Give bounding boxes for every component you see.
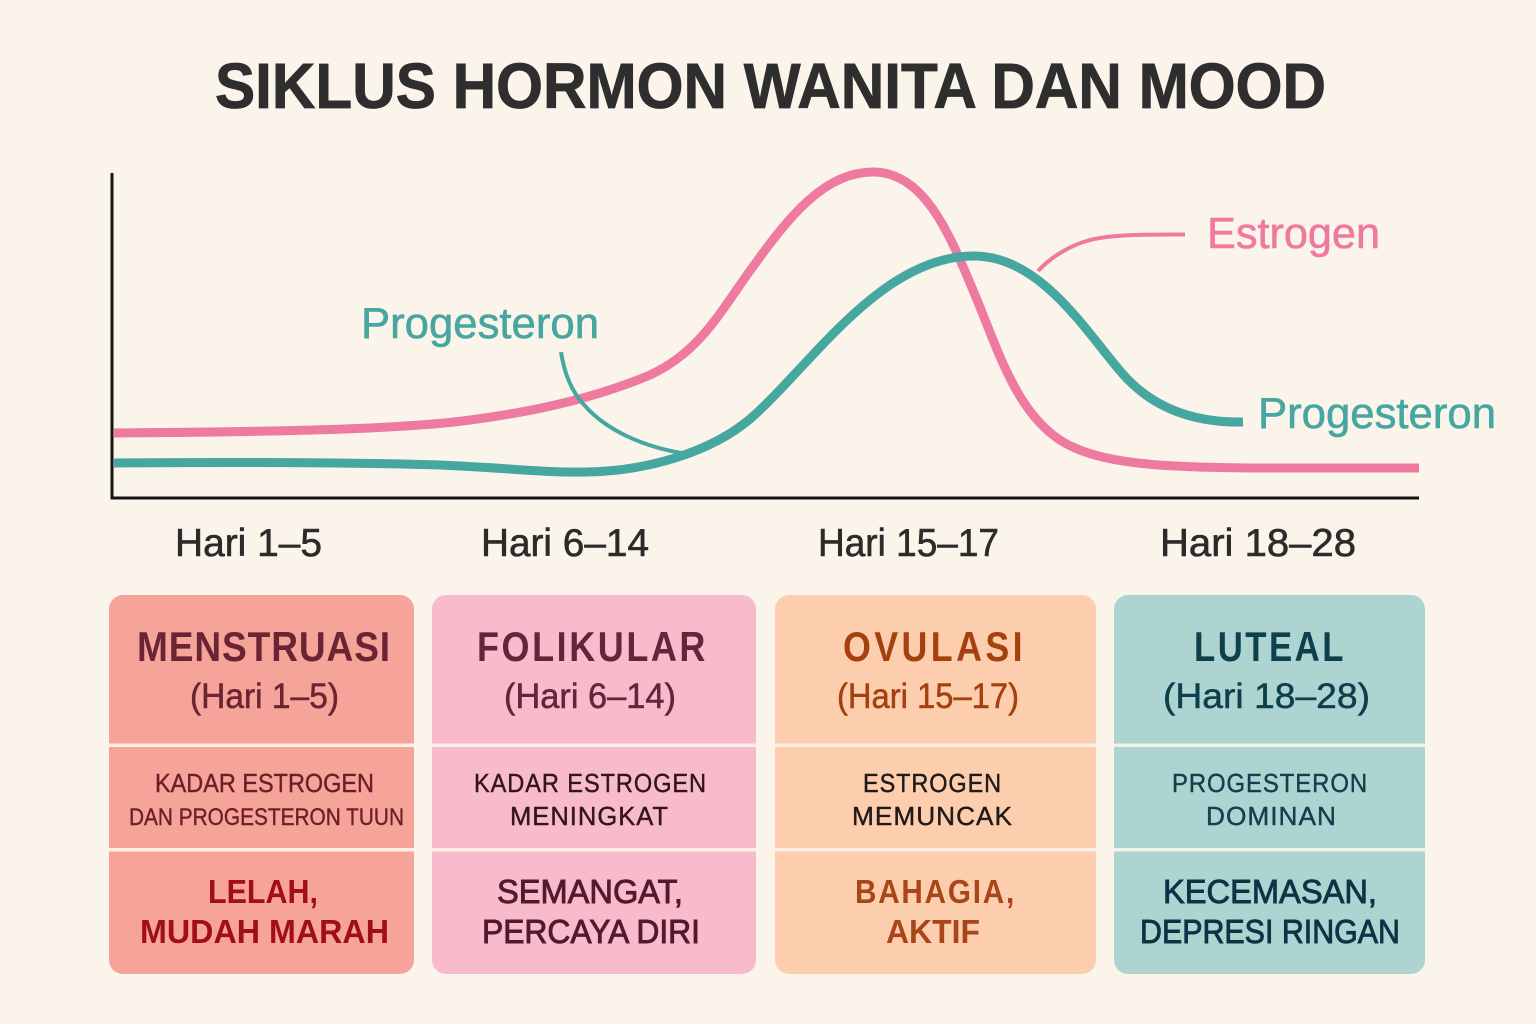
mood text: LELAH, (208, 873, 318, 910)
hormone text: MENINGKAT (510, 801, 669, 831)
hormone text (1172, 768, 1368, 831)
hormone text: DAN PROGESTERON TUUN (129, 804, 404, 831)
phase days: (Hari 15–17) (837, 677, 1019, 716)
estrogen label: Estrogen (1207, 209, 1380, 258)
mood text: KECEMASAN, (1163, 873, 1377, 910)
mood text: PERCAYA DIRI (482, 913, 700, 950)
progesterone callout leader (561, 352, 688, 454)
panel: luteal (1114, 595, 1425, 974)
progesterone label right: Progesteron (1258, 389, 1496, 438)
hormone line chart (112, 172, 1496, 498)
panel: folikular (432, 595, 756, 974)
estrogen callout leader (1038, 234, 1185, 271)
progesterone curve (114, 256, 1243, 472)
phase heading: OVULASI (843, 623, 1026, 670)
panel: menstruasi (109, 595, 414, 974)
hormone text: DOMINAN (1206, 801, 1337, 831)
hormone text (129, 768, 404, 831)
day label 1: Hari 1–5 (175, 522, 322, 565)
mood text (140, 873, 389, 950)
title: SIKLUS HORMON WANITA DAN MOOD (215, 50, 1326, 122)
mood text: BAHAGIA, (855, 873, 1016, 910)
mood text: AKTIF (886, 913, 980, 950)
phase days: (Hari 6–14) (504, 677, 676, 716)
hormone text: KADAR ESTROGEN (155, 768, 374, 798)
hormone text (474, 768, 707, 831)
phase days: (Hari 18–28) (1163, 677, 1370, 716)
day label 4: Hari 18–28 (1160, 522, 1356, 565)
phase heading: MENSTRUASI (137, 623, 391, 670)
mood text (855, 873, 1016, 950)
phase heading: LUTEAL (1194, 623, 1346, 670)
hormone text: KADAR ESTROGEN (474, 768, 707, 798)
estrogen curve (114, 172, 1419, 468)
hormone text: PROGESTERON (1172, 768, 1368, 798)
mood text (1140, 873, 1400, 950)
hormone text: ESTROGEN (863, 768, 1002, 798)
day label 3: Hari 15–17 (818, 522, 999, 565)
phase heading: FOLIKULAR (477, 623, 708, 670)
progesterone label left: Progesteron (361, 299, 599, 348)
chart axes (112, 173, 1419, 498)
mood text: SEMANGAT, (497, 873, 683, 910)
hormone text: MEMUNCAK (852, 801, 1013, 831)
mood text: MUDAH MARAH (140, 913, 389, 950)
day label 2: Hari 6–14 (481, 522, 649, 565)
mood text (482, 873, 700, 950)
phase days: (Hari 1–5) (190, 677, 339, 716)
mood text: DEPRESI RINGAN (1140, 913, 1400, 950)
hormone text (852, 768, 1013, 831)
panel: ovulasi (775, 595, 1096, 974)
